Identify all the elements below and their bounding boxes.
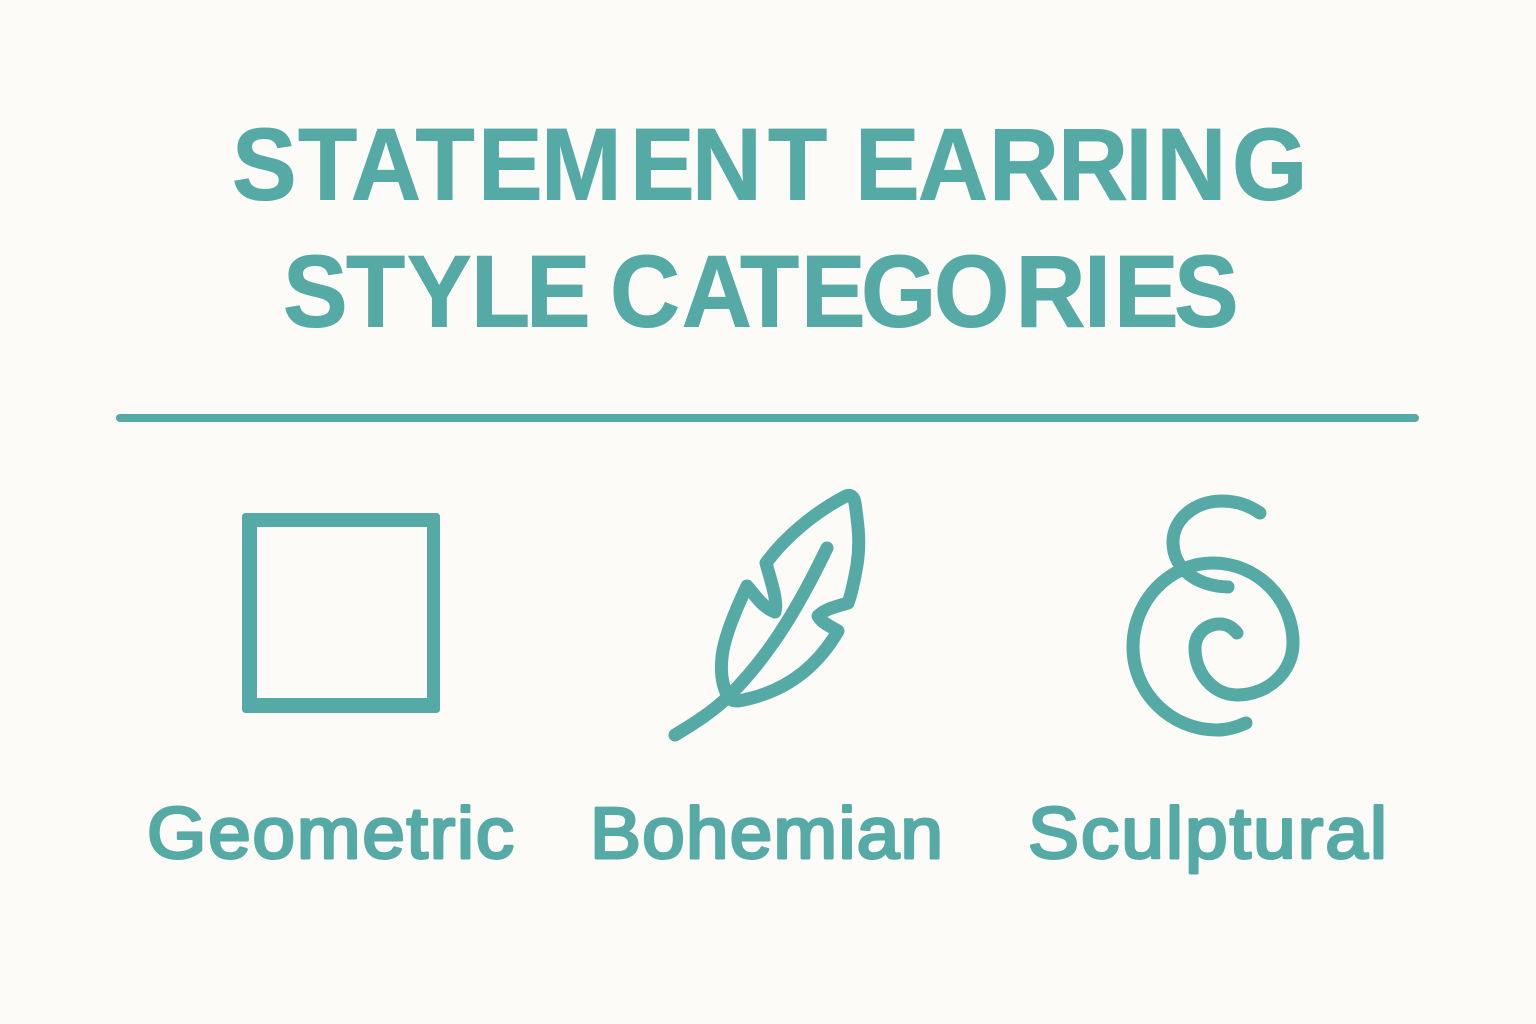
feather vane (721, 495, 859, 701)
feather shaft (675, 548, 827, 735)
icon: bohemian feather (675, 495, 859, 735)
spiral upper hook (1173, 501, 1260, 587)
divider line (120, 414, 1415, 422)
spiral main coil (1133, 563, 1293, 730)
label: Sculptural: Sculptural (1028, 793, 1387, 874)
title (232, 108, 1307, 349)
title: STATEMENT EARRING (232, 108, 1307, 222)
icon: geometric square (242, 513, 440, 713)
label: Geometric: Geometric (147, 793, 514, 874)
icon: sculptural spiral (1133, 501, 1293, 730)
label: Bohemian: Bohemian (590, 793, 943, 874)
title: STYLE CATEGORIES (283, 235, 1239, 349)
